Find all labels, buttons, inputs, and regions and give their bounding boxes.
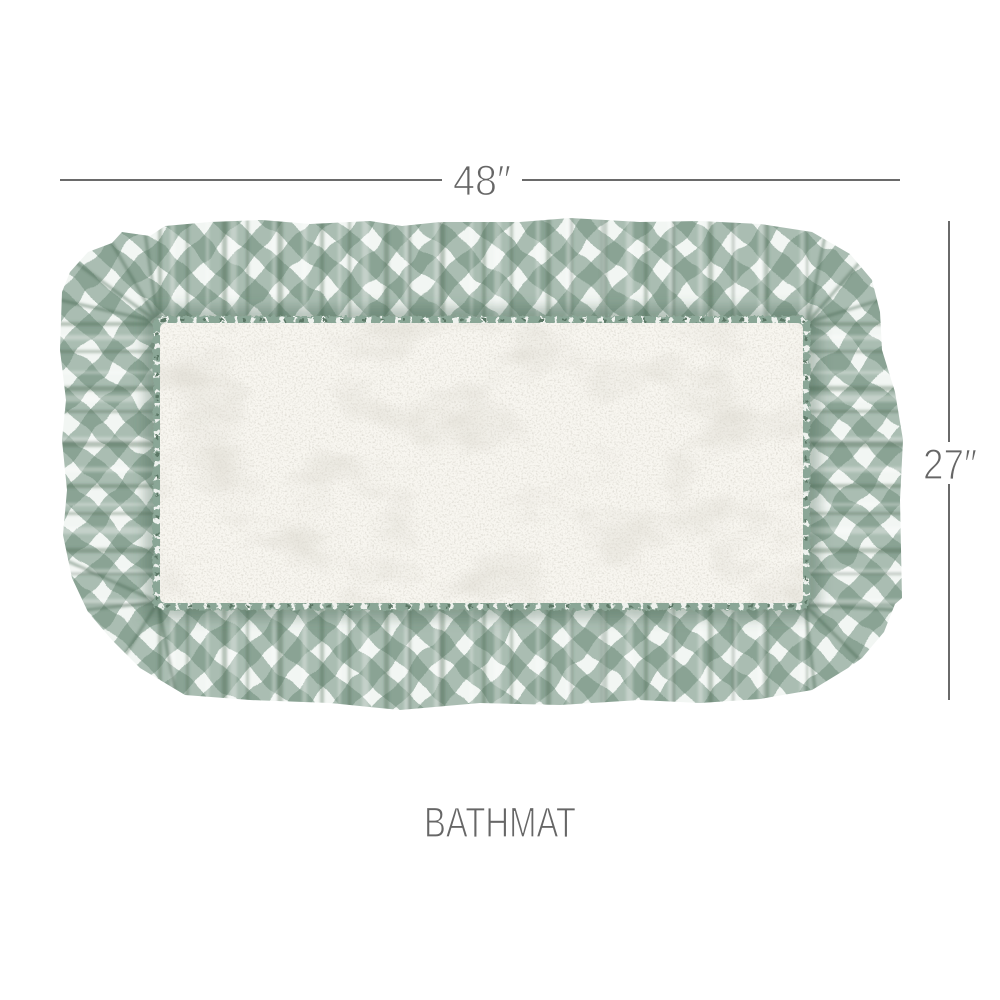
width dimension line xyxy=(60,179,900,181)
shaggy cream centre xyxy=(160,323,803,603)
width label: 48″ xyxy=(453,157,511,205)
height label: 27″ xyxy=(923,441,977,489)
product name: BATHMAT xyxy=(424,799,576,847)
height dimension line xyxy=(948,221,950,700)
bathmat product xyxy=(60,218,903,710)
braided trim xyxy=(157,320,806,606)
ruffle: gingham border xyxy=(60,218,903,710)
